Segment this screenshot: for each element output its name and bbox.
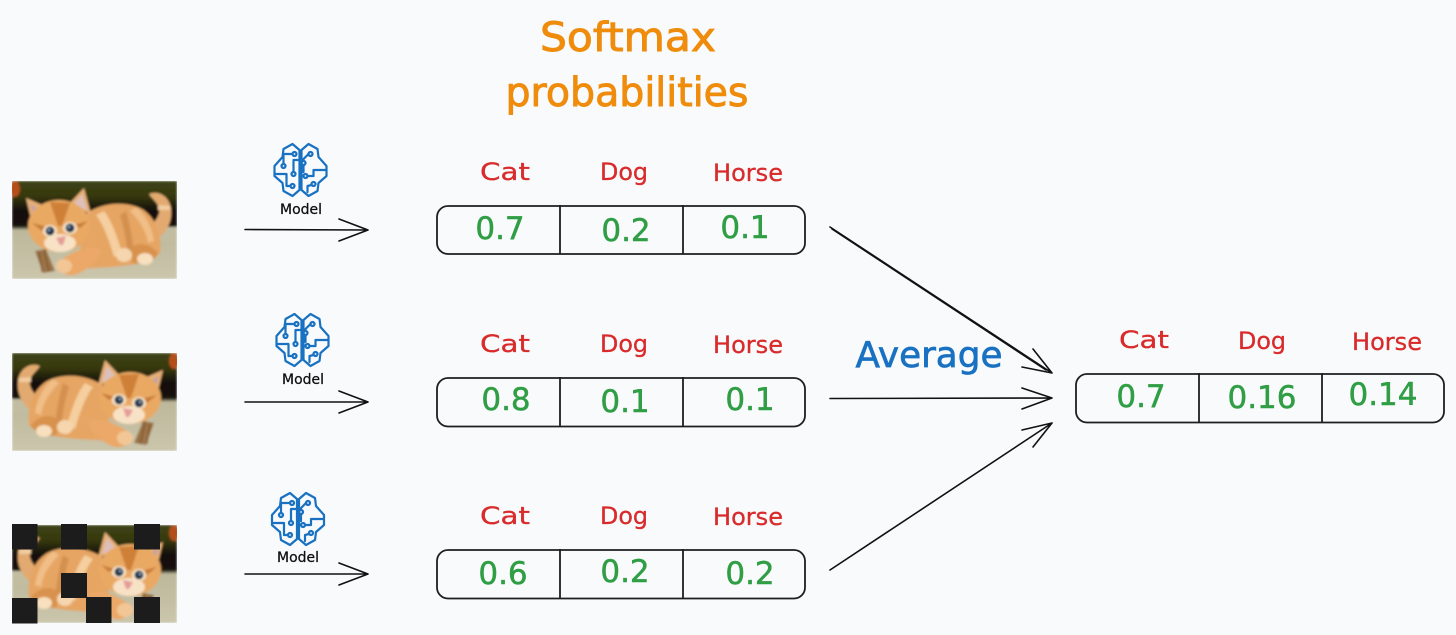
image: kitten 3 with black masked patches [12,524,179,624]
row 3 probability table: 0.2 [725,556,775,592]
row 3 class labels [480,502,783,531]
arrow: row 1 to average [830,227,1052,373]
row 1 probability table: 0.1 [720,210,770,246]
image: kitten 2 mirrored [12,353,179,451]
result probability table: 0.14 [1348,377,1418,413]
arrow: row 2 to average [830,388,1052,409]
row 3 class labels: Cat [480,502,530,530]
label: Model 2: Model [282,372,324,388]
label: Model 3: Model [277,550,319,566]
result class labels [1119,326,1422,356]
row 1 probability table: 0.2 [601,213,651,249]
title: Softmax probabilities: probabilities [506,70,748,116]
result probability table [1076,373,1444,423]
arrow: image 2 to probabilities [245,391,368,413]
arrow: image 3 to probabilities [245,563,368,585]
title: Softmax probabilities [506,15,748,116]
icon: model brain 2 [276,314,328,366]
row 1 class labels [480,158,783,187]
title: Softmax probabilities: Softmax [540,15,716,61]
row 2 class labels [480,330,783,359]
row 1 class labels: Horse [713,159,783,187]
row 3 class labels: Dog [600,502,648,530]
row 1 class labels: Dog [600,158,648,186]
result class labels: Horse [1352,328,1422,356]
row 1 class labels: Cat [480,158,530,186]
icon: model brain 3 [272,493,324,545]
row 3 class labels: Horse [713,503,783,531]
label: Average: Average [856,335,1002,376]
row 2 class labels: Horse [713,331,783,359]
row 1 probability table: 0.7 [475,211,525,247]
row 1 probability table [437,205,805,254]
icon: model brain 1 [274,144,326,196]
row 2 probability table [437,377,805,427]
row 2 probability table: 0.1 [725,382,775,418]
image: kitten 1 [10,181,177,279]
row 2 class labels: Dog [600,330,648,358]
row 3 probability table: 0.6 [478,556,528,592]
result probability table: 0.16 [1227,380,1297,416]
result class labels: Dog [1238,327,1286,355]
row 2 class labels: Cat [480,330,530,358]
arrow: row 3 to average [830,423,1052,570]
row 3 probability table [437,549,805,599]
label: Model 1: Model [280,202,322,218]
row 2 probability table: 0.1 [600,384,650,420]
result probability table: 0.7 [1116,379,1166,415]
row 2 probability table: 0.8 [481,382,531,418]
result class labels: Cat [1119,326,1169,354]
row 3 probability table: 0.2 [600,554,650,590]
arrow: image 1 to probabilities [245,219,368,241]
